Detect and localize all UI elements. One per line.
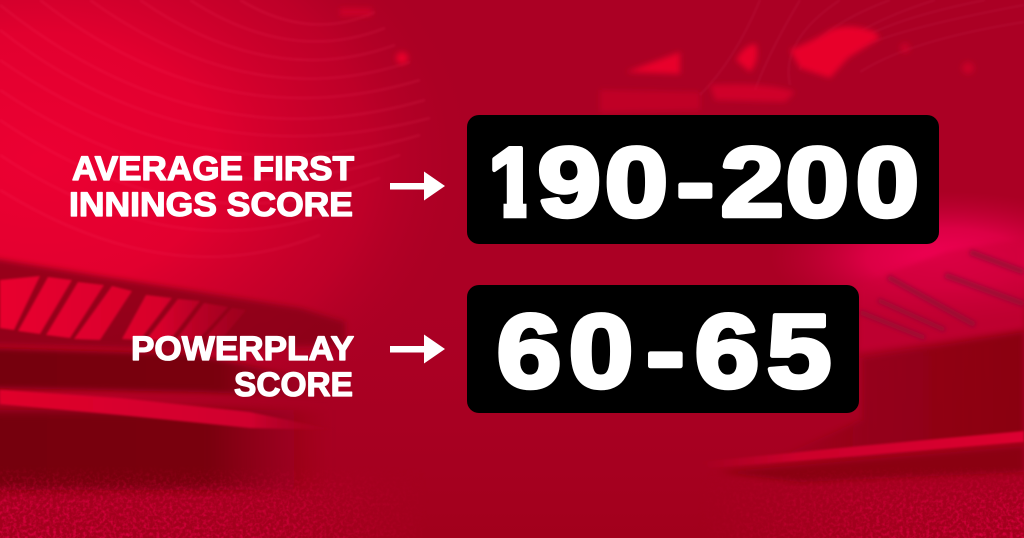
background: dark stand and ledge, lower right bbox=[700, 332, 1024, 482]
value box: 190-200 bbox=[467, 115, 939, 244]
background: stand ledge, lower left bbox=[0, 390, 335, 490]
label: powerplay score: POWERPLAY bbox=[131, 330, 354, 368]
background: crowd texture bbox=[0, 470, 1024, 538]
background: stadium roof, left bbox=[0, 258, 345, 398]
background: curved light lines, upper left bbox=[0, 0, 430, 257]
label: powerplay score bbox=[131, 330, 354, 404]
background: stadium roof, right bbox=[858, 238, 1024, 352]
value box: 190-200: 1 bbox=[488, 128, 537, 237]
background: blurred red cloud shapes, upper right bbox=[340, 8, 974, 112]
label: average first innings score bbox=[69, 150, 354, 224]
label: powerplay score: SCORE bbox=[234, 366, 353, 404]
label: average first innings score: AVERAGE FIRST bbox=[72, 150, 354, 188]
arrow: first innings bbox=[390, 172, 445, 200]
value box: 60-65: 60-65 bbox=[497, 294, 831, 410]
arrow: powerplay bbox=[390, 334, 445, 364]
label: average first innings score: INNINGS SCORE bbox=[69, 186, 353, 224]
background: curved light lines, upper right bbox=[700, 0, 1024, 95]
value box: 190-200: 90-200 bbox=[538, 128, 919, 237]
